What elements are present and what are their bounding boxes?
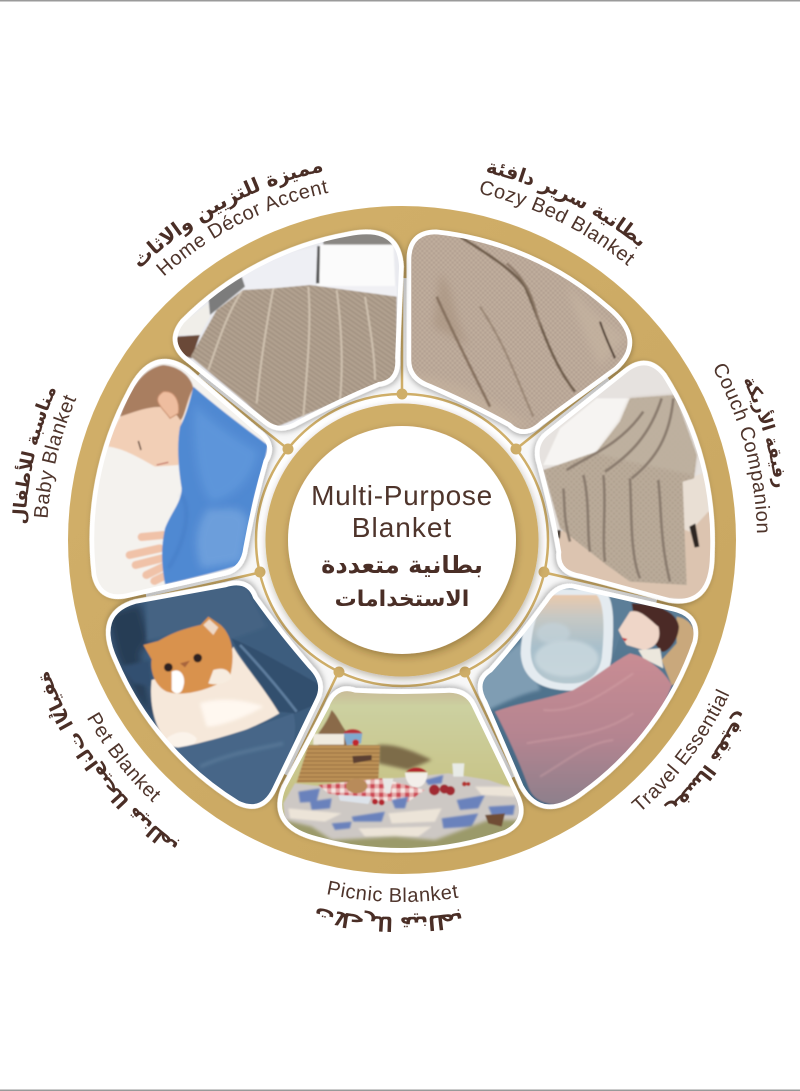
label: picnic blanket: Picnic Blanket	[328, 880, 459, 902]
headrest	[662, 617, 695, 685]
panel: cozy bed blanket photo	[400, 223, 640, 443]
baby head	[108, 388, 193, 467]
bowl of strawberries	[343, 733, 362, 745]
blanket fold over cat	[232, 638, 321, 713]
thin gold ring with spokes and dots	[139, 270, 665, 783]
lower blanket	[173, 713, 295, 810]
icon: airplane window	[521, 588, 613, 691]
blue blanket	[162, 387, 268, 584]
label: pet blanket: Pet Blanket	[87, 712, 160, 802]
center title: Blanket	[352, 512, 452, 543]
center title	[311, 480, 493, 612]
woman face	[618, 611, 659, 650]
label: picnic blanket	[316, 880, 462, 932]
picnic blanket	[283, 773, 522, 848]
center white circle	[288, 426, 516, 654]
pink blanket	[495, 653, 672, 805]
panel: home decor accent photo	[172, 228, 409, 435]
label: couch companion: Couch Companion	[714, 364, 770, 532]
center title: الاستخدامات	[335, 587, 469, 612]
label: picnic blanket: بطانية للرحلات	[316, 908, 462, 932]
label: pet blanket: بطانية للحيوانات الأليفة	[40, 672, 180, 848]
label: travel essential: رفيقة السفر	[664, 711, 742, 807]
label: home decor accent: مميزة للتزيين والاثاث	[137, 166, 322, 266]
cat head	[143, 617, 233, 694]
center title: Multi-Purpose	[311, 480, 493, 511]
baby hand	[130, 535, 165, 581]
panel: picnic blanket photo	[274, 682, 526, 854]
label: travel essential: Travel Essential	[630, 688, 730, 810]
panel: travel essential photo	[472, 580, 700, 812]
white wheel base	[140, 278, 664, 802]
cat paw	[167, 732, 197, 748]
label: home decor accent: Home Décor Accent	[156, 180, 328, 276]
label: cozy bed blanket: Cozy Bed Blanket	[480, 181, 634, 266]
bread and food	[346, 779, 367, 793]
label: cozy bed blanket: بطانية سرير دافئة	[487, 163, 643, 249]
bottom grass	[282, 820, 522, 850]
collar	[638, 648, 663, 668]
label: baby blanket: مناسبة للأطفال	[12, 388, 56, 524]
inner gold ring	[266, 404, 538, 676]
taupe blanket	[191, 285, 397, 428]
baby hair	[120, 365, 193, 420]
outer gold ring	[68, 206, 736, 874]
basket	[297, 745, 380, 783]
panel: pet blanket photo	[104, 576, 327, 810]
panel: baby blanket photo	[88, 356, 278, 602]
label: couch companion: رفيقة الأريكة	[744, 378, 784, 488]
center title: بطانية متعددة	[321, 551, 483, 579]
woman hair	[632, 603, 679, 652]
panel: couch companion photo	[530, 359, 716, 608]
cat body	[151, 647, 279, 746]
label: baby blanket: Baby Blanket	[34, 394, 76, 518]
